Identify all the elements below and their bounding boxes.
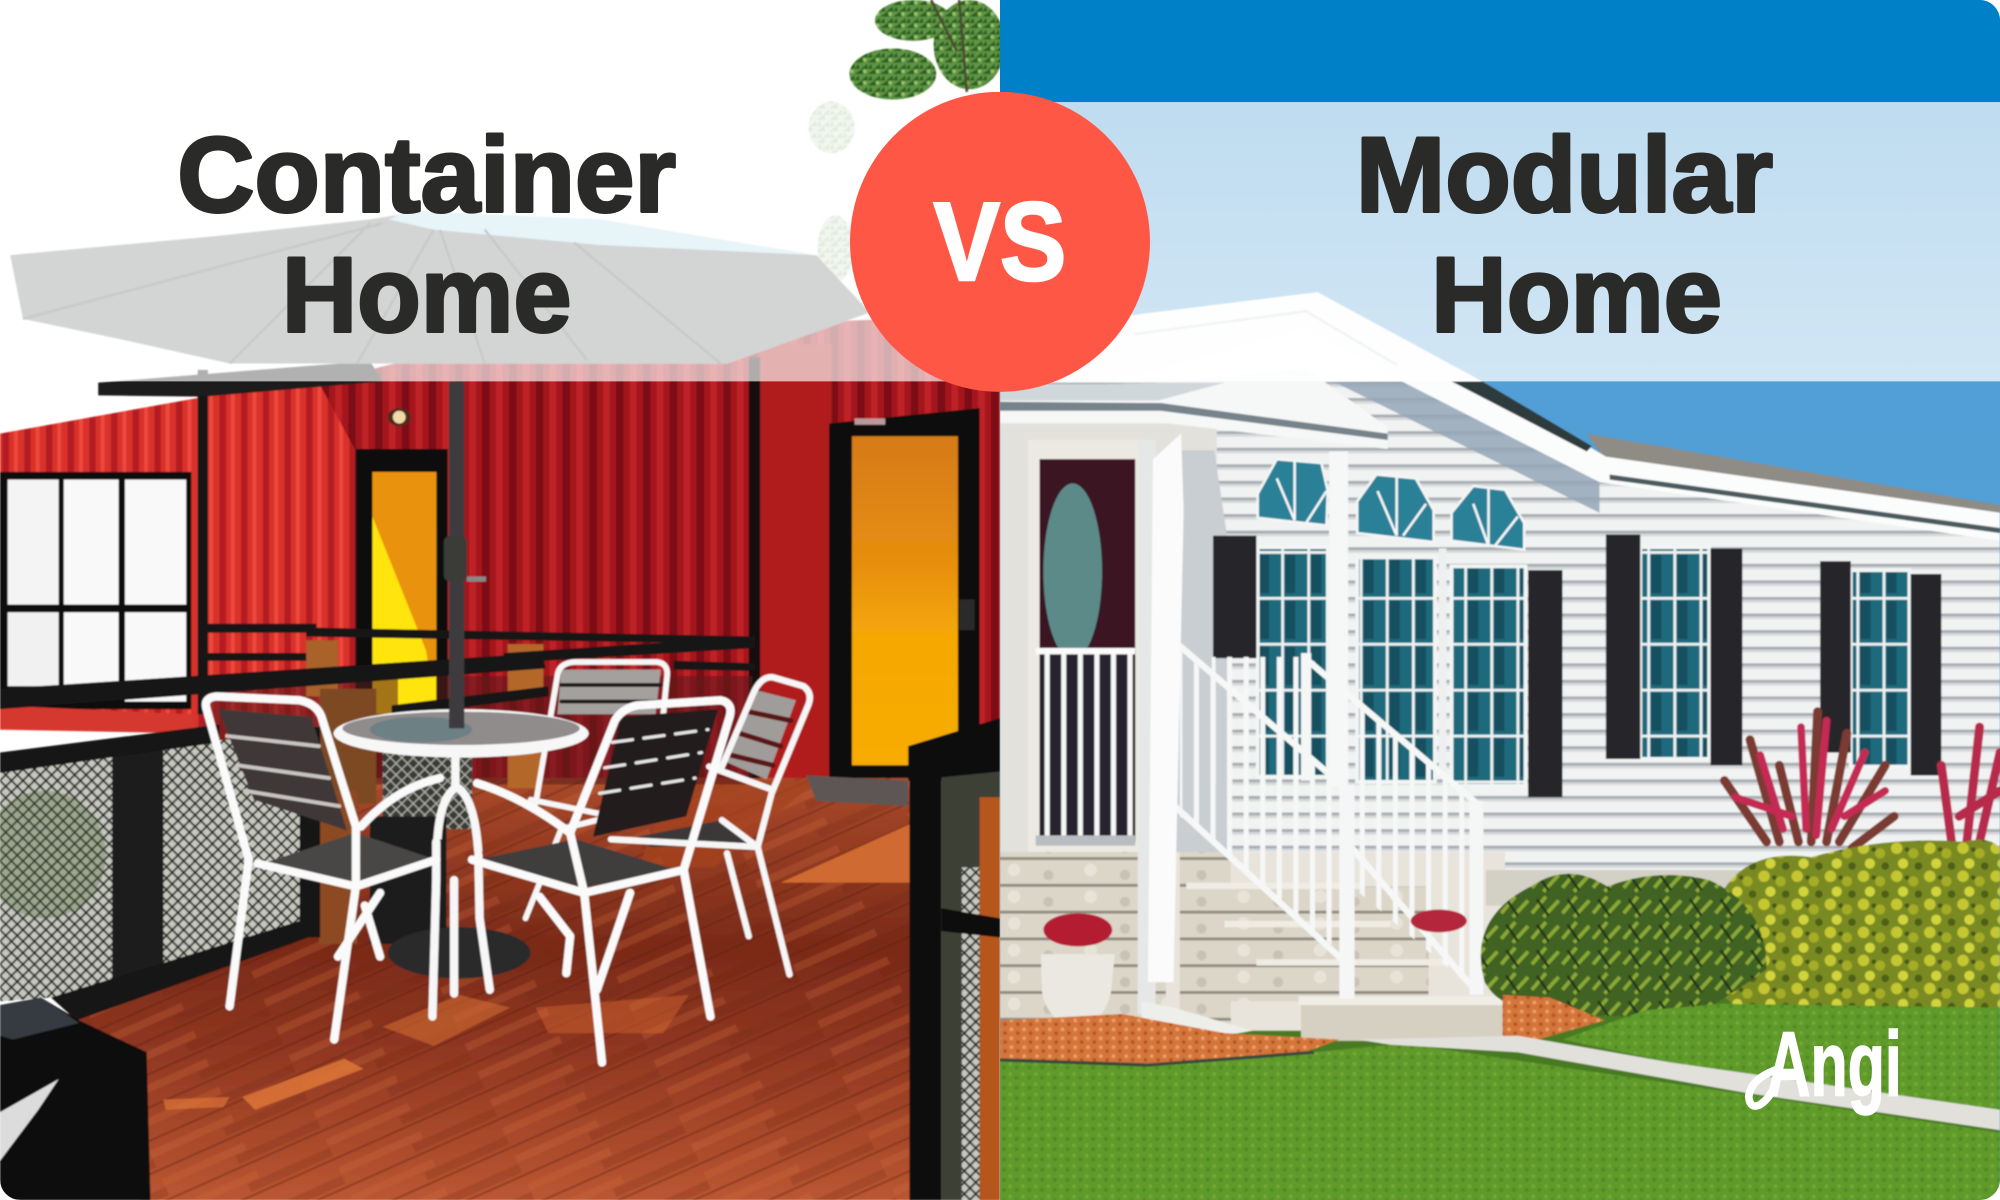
mesh balustrade (0, 653, 546, 1020)
shingled roof (1587, 434, 2000, 523)
small red flowers on step (1411, 909, 1467, 932)
main gable and eave (1000, 292, 2000, 541)
door: small yellow door (356, 449, 448, 723)
blue header strip (1000, 0, 2000, 102)
panel: container home photo (0, 0, 1005, 1200)
walkway (1357, 1036, 2000, 1130)
red ti plants (1724, 712, 2000, 848)
heading: modular home: Modular (1356, 115, 1773, 235)
umbrella pole (444, 381, 486, 728)
window: tall center windows (1258, 452, 1526, 786)
left photo scene (0, 0, 1005, 1200)
vs badge (850, 92, 1150, 392)
left container with window (0, 398, 198, 733)
right chair (597, 677, 810, 990)
lawn (1000, 1004, 2000, 1200)
yellow green hedge (1706, 840, 2000, 1010)
tree behind the container (809, 0, 1005, 282)
porch column (1138, 434, 1253, 1036)
logo: Angi: Angi (1767, 1014, 1902, 1116)
patio umbrella base (388, 927, 531, 978)
vs badge: VS (934, 180, 1066, 304)
house wall with siding (1000, 381, 2000, 872)
wall lamp (388, 408, 411, 426)
left front chair (206, 696, 440, 1040)
beige wall under the porch (1000, 423, 1217, 857)
shaded siding below the eave (1333, 381, 1599, 513)
main red container wall (98, 319, 1000, 781)
planter with red flowers (1041, 913, 1115, 1028)
heading: modular home: Home (1431, 235, 1722, 355)
patio table (334, 709, 589, 1017)
stone foundation and steps (1000, 852, 1741, 1041)
porch roof (1000, 382, 1389, 450)
logo: Angi (1749, 1014, 1902, 1116)
window: right windows (1640, 547, 1909, 767)
heading: container home: Container (177, 115, 676, 235)
deck floor (51, 776, 913, 1200)
arched windows (1258, 459, 1524, 550)
band overlay on left (0, 102, 1000, 381)
stair railings (1175, 642, 1483, 999)
back chair (526, 662, 667, 918)
panel: modular home photo (1000, 0, 2000, 1200)
door: large orange door (829, 408, 980, 781)
foreground right post (908, 718, 1000, 1200)
umbrella canopy (10, 210, 870, 364)
dark green shrubs (1481, 874, 1767, 1016)
right photo scene (1000, 292, 2000, 1200)
heading: container home (177, 115, 676, 355)
heading: modular home (1356, 115, 1773, 355)
foreground left post (0, 997, 151, 1200)
heading: container home: Home (282, 235, 571, 355)
window shutters (1213, 534, 1941, 797)
back railing and planter boxes (202, 624, 755, 944)
front door (1028, 440, 1140, 855)
ground base under plants (1000, 996, 2000, 1200)
center front chair (472, 700, 730, 1062)
band overlay on right (1000, 102, 2000, 381)
orange mulch (1000, 995, 1605, 1064)
